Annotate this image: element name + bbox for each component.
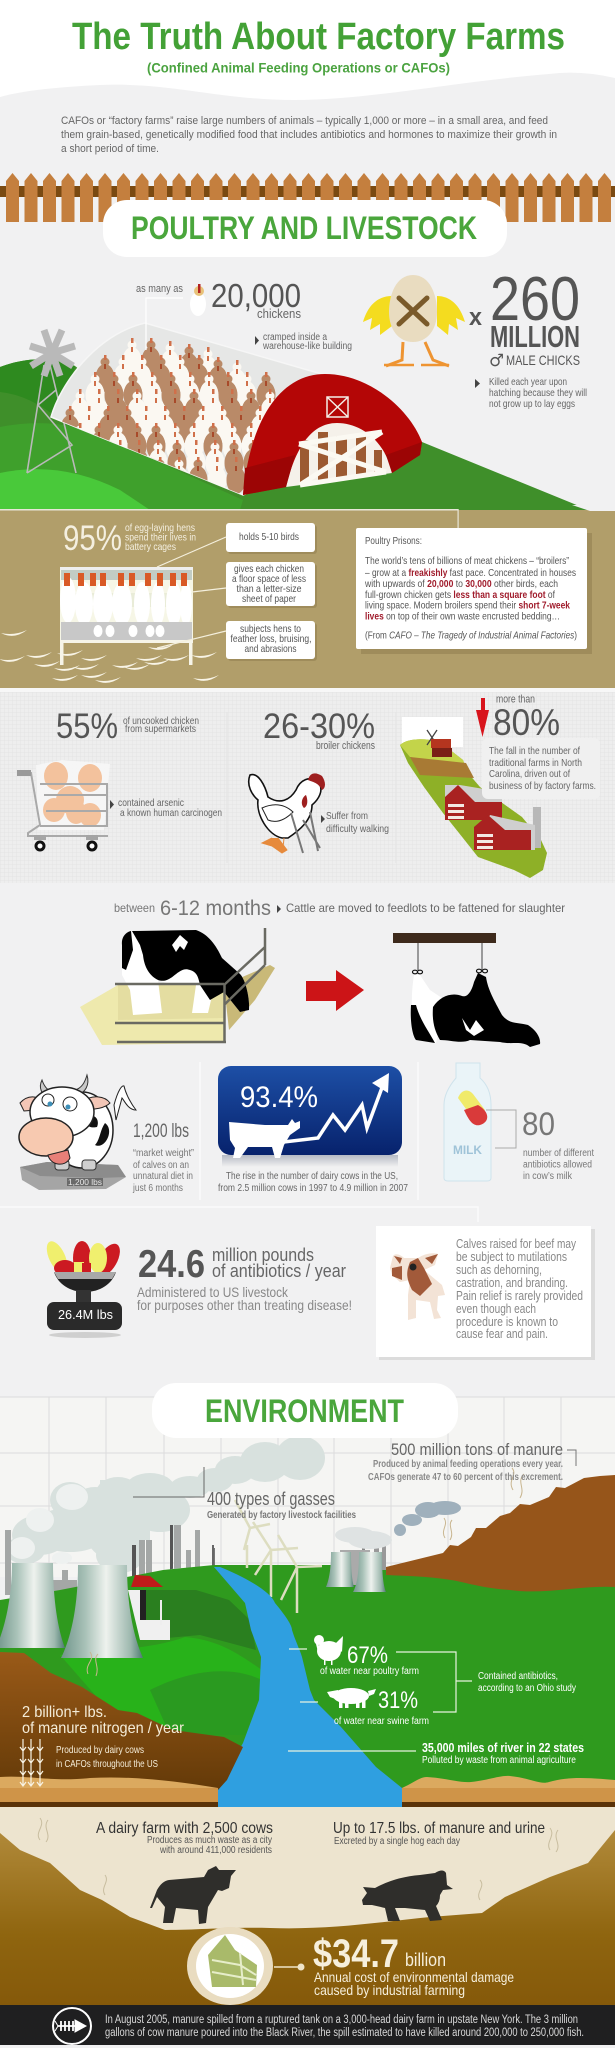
environment scene: [0, 1397, 615, 1807]
260 million male chicks: 260: [490, 265, 580, 334]
light dividers: [0, 1062, 478, 1222]
as many as 20,000 chickens: 20,000: [211, 277, 301, 314]
red barn and white factory: [128, 1575, 170, 1640]
illustration: cow at feedlot: [80, 928, 275, 1045]
$34.7 billion stat: billion: [405, 1950, 446, 1970]
cattle heading: between: [114, 901, 155, 915]
$34.7 billion stat: $34.7: [313, 1932, 399, 1976]
factory stacks: [5, 1525, 229, 1625]
$34.7 billion stat: [313, 1932, 514, 1998]
26-30% stat: 26-30%: [263, 707, 375, 746]
water contamination stats: Polluted by waste from animal agriculture: [422, 1755, 576, 1766]
hog text: Excreted by a single hog each day: [334, 1836, 460, 1847]
2 billion lbs manure nitrogen: 2 billion+ lbs.: [22, 1704, 107, 1721]
80% stat with down arrow: more than: [496, 694, 535, 706]
80% stat with down arrow: The fall in the number of: [489, 745, 580, 757]
dairy farm text: A dairy farm with 2,500 cows: [96, 1820, 273, 1837]
400 types of gasses: [133, 1467, 356, 1521]
260 million male chicks: hatching because they will: [489, 387, 587, 399]
icon: down arrows: [20, 1739, 43, 1786]
callout: feather loss: feather loss, bruising,: [230, 633, 312, 645]
market weight text: 1,200 lbs: [133, 1121, 189, 1142]
hog text: [333, 1820, 545, 1847]
arrow: red: [306, 970, 364, 1011]
2 billion lbs manure nitrogen: of manure nitrogen / year: [22, 1720, 185, 1737]
small smoke, right: [335, 1501, 461, 1549]
cattle heading: Cattle are moved to feedlots to be fattened for slaughter: [286, 901, 565, 915]
24.6 million pounds stat: million pounds: [212, 1245, 314, 1265]
55% stat: 55%: [56, 707, 118, 746]
80% stat with down arrow: [476, 694, 600, 799]
cooling towers, left: [0, 1563, 143, 1658]
fence: [0, 173, 615, 222]
panel: waste comparison: [0, 1807, 615, 2005]
intro paragraph: a short period of time.: [61, 143, 159, 155]
icon: egg chick with crossbones: [363, 275, 465, 366]
callout: floor space: a floor space of less: [232, 573, 306, 585]
2 billion lbs manure nitrogen: Produced by dairy cows: [56, 1745, 144, 1756]
chart panel: 93.4% dairy cows: [218, 1066, 408, 1194]
cattle heading: 6-12 months: [160, 897, 271, 920]
260 million male chicks: MALE CHICKS: [506, 352, 580, 368]
heading pill: poultry and livestock: [103, 200, 507, 257]
as many as 20,000 chickens: cramped inside a: [263, 332, 327, 343]
$34.7 billion stat: Annual cost of environmental damage: [314, 1969, 514, 1985]
callout: holds 5-10 birds: [226, 523, 317, 554]
water contamination stats: 35,000 miles of river in 22 states: [422, 1740, 584, 1755]
callout: floor space: [226, 562, 317, 608]
heading pill: environment: [152, 1383, 458, 1438]
windmill: [27, 330, 76, 473]
as many as 20,000 chickens: [136, 277, 352, 352]
icon: hen silhouette: [314, 1635, 343, 1665]
water contamination stats: Contained antibiotics,: [478, 1671, 558, 1682]
market weight text: “market weight”: [133, 1148, 194, 1159]
market weight text: [132, 1121, 194, 1194]
24.6 million pounds stat: Administered to US livestock: [137, 1284, 289, 1300]
cow silhouette: [229, 1119, 300, 1158]
subtitle: (Confined Animal Feeding Operations or CAFOs): [147, 60, 450, 76]
260 million male chicks: [469, 265, 587, 410]
panel: calves: even though each: [456, 1301, 536, 1316]
500 million tons of manure: 500 million tons of manure: [391, 1440, 563, 1459]
24.6 million pounds stat: for purposes other than treating disease!: [137, 1297, 352, 1313]
500 million tons of manure: CAFOs generate 47 to 60 percent of this excrement.: [368, 1472, 563, 1483]
panel: calves: such as dehorning,: [456, 1262, 542, 1277]
cooling towers, right: [326, 1535, 386, 1592]
feathers: [0, 630, 219, 683]
text box: poultry prisons: living space. Modern broilers spend their short 7-week: [365, 600, 570, 612]
text box: poultry prisons: Poultry Prisons:: [365, 535, 422, 547]
heading pill: poultry and livestock: POULTRY AND LIVESTOCK: [131, 210, 477, 246]
panel: calves: be subject to mutilations: [456, 1249, 567, 1264]
80 antibiotics stat: antibiotics allowed: [523, 1160, 592, 1170]
55% stat: of uncooked chicken: [123, 715, 199, 727]
green hills: [0, 359, 590, 510]
scale: [20, 1162, 126, 1190]
illustration: milk bottle with pill: MILK: [453, 1143, 482, 1157]
95% stat: [63, 519, 196, 558]
260 million male chicks: ♂: [489, 351, 504, 371]
market weight text: just 6 months: [132, 1183, 183, 1194]
panel: calves: castration, and branding.: [456, 1275, 568, 1290]
80 antibiotics stat: number of different: [523, 1148, 594, 1159]
pig silhouette: [362, 1870, 453, 1921]
text box: poultry prisons: with upwards of 20,000 to 30,000 other birds, each: [364, 578, 558, 590]
map: North Carolina farms: [400, 717, 547, 878]
95% stat: 95%: [63, 519, 122, 558]
cattle heading: [114, 897, 565, 920]
icon: pills on digital scale: 26.4M lbs: [58, 1307, 113, 1322]
chart panel: 93.4% dairy cows: 93.4%: [240, 1081, 318, 1114]
wind turbines: [235, 1500, 322, 1613]
panel: calves: [376, 1226, 595, 1360]
callout: feather loss: and abrasions: [244, 643, 296, 655]
arsenic note: contained arsenic: [118, 797, 184, 809]
footer bar: [0, 2005, 615, 2048]
heading pill: environment: ENVIRONMENT: [205, 1393, 404, 1429]
steam wisps: [87, 1468, 524, 1676]
callout: floor space: sheet of paper: [242, 593, 296, 605]
icon: hen on crutches: [249, 773, 325, 853]
cow silhouette: [150, 1866, 236, 1924]
260 million male chicks: x: [469, 304, 483, 331]
callout: floor space: gives each chicken: [234, 563, 304, 575]
sand banks: [0, 1776, 615, 1807]
scale: 1,200 lbs: [68, 1178, 102, 1187]
26-30% stat: broiler chickens: [316, 740, 375, 752]
2 billion lbs manure nitrogen: [20, 1704, 185, 1786]
panel: chicken stats: [0, 688, 615, 883]
panel: battery cages: [0, 505, 615, 688]
text box: poultry prisons: [356, 528, 592, 654]
95% stat: battery cages: [125, 541, 176, 553]
text box: poultry prisons: lives on top of their own waste encrusted bedding…: [365, 610, 560, 622]
panel: calves: cause fear and pain.: [456, 1326, 548, 1341]
illustration: hanging cow: [393, 933, 540, 1047]
panel: calves: Calves raised for beef may: [456, 1236, 576, 1251]
water contamination stats: 67%: [347, 1642, 388, 1669]
difficulty walking note: [321, 810, 389, 835]
dairy farm text: Produces as much waste as a city: [147, 1835, 272, 1846]
steam wisps: [38, 1818, 558, 1900]
400 types of gasses: 400 types of gasses: [207, 1489, 335, 1509]
as many as 20,000 chickens: chickens: [257, 306, 301, 321]
difficulty walking note: difficulty walking: [326, 823, 389, 835]
2 billion lbs manure nitrogen: in CAFOs throughout the US: [56, 1759, 158, 1770]
260 million male chicks: MILLION: [490, 319, 580, 354]
80% stat with down arrow: 80%: [493, 702, 560, 743]
market weight text: unnatural diet in: [133, 1171, 193, 1182]
dairy farm text: with around 411,000 residents: [159, 1845, 272, 1856]
green ground: [0, 1565, 615, 1790]
factory barn two: [474, 807, 541, 850]
icon: calf: [390, 1253, 445, 1320]
icon: shopping cart with chicken: [17, 760, 110, 850]
illustration: cartoon cow on scale: [19, 1075, 194, 1194]
smoke clouds: [5, 1436, 325, 1573]
callout: feather loss: [226, 621, 317, 661]
95% stat: of egg-laying hens: [125, 522, 195, 534]
intro paragraph: CAFOs or “factory farms” raise large numbers of animals – typically 1,000 or more – in a small area, and feed: [61, 115, 548, 127]
top header background: [0, 0, 615, 510]
80 antibiotics stat: [486, 1106, 594, 1182]
medallion: stack of money: [187, 1927, 304, 2005]
river: [214, 1567, 402, 1807]
500 million tons of manure: [368, 1440, 576, 1483]
arsenic note: [110, 797, 222, 819]
95% stat: spend their lives in: [125, 532, 196, 544]
battery cage illustration: [60, 567, 193, 665]
water contamination stats: [288, 1635, 584, 1766]
callout connectors: [157, 537, 226, 648]
brown manure hill, right: [386, 1475, 615, 1591]
55% stat: from supermarkets: [125, 723, 196, 735]
260 million male chicks: not grow up to lay eggs: [489, 398, 575, 410]
water contamination stats: of water near swine farm: [334, 1716, 429, 1727]
red barn front arch: [243, 374, 422, 495]
24.6 million pounds stat: 24.6: [138, 1243, 205, 1286]
icon: pig silhouette: [327, 1688, 376, 1708]
factory barn one: [445, 785, 502, 820]
water contamination stats: according to an Ohio study: [478, 1683, 576, 1694]
intro paragraph: [61, 115, 557, 155]
brown manure hill, left: [0, 1652, 243, 1790]
icon: fish skeleton: [53, 2008, 91, 2044]
difficulty walking note: Suffer from: [326, 810, 368, 822]
400 types of gasses: Generated by factory livestock facilities: [207, 1510, 356, 1521]
80 antibiotics stat: in cow’s milk: [523, 1171, 573, 1182]
intro paragraph: them grain-based, genetically modified food that includes antibiotics and hormones to maximize their growth in: [61, 129, 557, 141]
panel: calves: procedure is known to: [456, 1314, 558, 1329]
hog text: Up to 17.5 lbs. of manure and urine: [333, 1820, 545, 1837]
260 million male chicks: Killed each year upon: [489, 376, 567, 388]
24.6 million pounds stat: [137, 1243, 352, 1313]
as many as 20,000 chickens: warehouse-like building: [262, 341, 352, 352]
icon: pills on digital scale: [43, 1238, 125, 1338]
80% stat with down arrow: Carolina, driven out of: [489, 768, 570, 780]
callout: holds 5-10 birds: holds 5-10 birds: [239, 531, 299, 543]
callout: floor space: than a letter-size: [236, 583, 302, 595]
callout: feather loss: subjects hens to: [240, 623, 301, 635]
warehouse full of chickens: [51, 323, 422, 495]
rising arrow: [275, 1073, 389, 1143]
80% stat with down arrow: traditional farms in North: [489, 757, 582, 769]
500 million tons of manure: Produced by animal feeding operations every year.: [373, 1459, 563, 1470]
chart panel: 93.4% dairy cows: from 2.5 million cows in 1997 to 4.9 million in 2007: [218, 1182, 408, 1194]
55% stat: [56, 707, 199, 746]
text box: poultry prisons: full-grown chicken gets less than a square foot of: [365, 589, 555, 601]
water contamination stats: of water near poultry farm: [320, 1666, 419, 1677]
dairy farm text: [96, 1820, 273, 1856]
as many as 20,000 chickens: as many as: [136, 283, 183, 295]
sky grid: [0, 1397, 615, 1600]
panel: calves: Pain relief is rarely provided: [456, 1288, 583, 1303]
24.6 million pounds stat: of antibiotics / year: [212, 1261, 346, 1281]
$34.7 billion stat: caused by industrial farming: [314, 1982, 465, 1998]
market weight text: of calves on an: [133, 1160, 189, 1171]
text box: poultry prisons: – grow at a freakishly fast pace. Concentrated in houses: [365, 567, 576, 579]
arsenic note: a known human carcinogen: [120, 807, 222, 819]
illustration: milk bottle with pill: [444, 1063, 491, 1181]
80 antibiotics stat: 80: [522, 1106, 555, 1142]
chart panel: 93.4% dairy cows: The rise in the number of dairy cows in the US,: [226, 1170, 398, 1182]
water contamination stats: 31%: [378, 1687, 418, 1714]
